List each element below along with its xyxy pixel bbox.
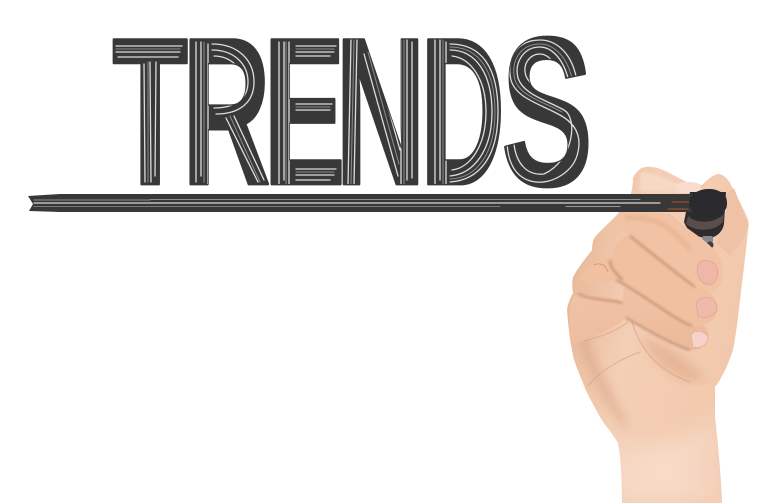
line body [28,194,693,212]
letter D: D [420,0,505,230]
marker body [684,189,728,248]
palm creases [574,322,690,386]
hand holding marker [567,167,749,503]
letter R: R [182,0,271,229]
letter S: S [501,0,593,230]
letter T [112,38,188,186]
letter E: E [263,0,346,229]
letter S [504,36,588,188]
marker tip over line [689,189,727,217]
ring finger [569,280,708,350]
index finger [612,212,723,292]
palm shadow [579,340,626,424]
letter E [270,38,342,186]
letter N [342,38,418,186]
soft shading clipped to hand [574,172,725,503]
hand and wrist silhouette [567,167,749,503]
underline stroke drawn by marker [28,194,693,212]
letter D [427,38,501,186]
finger crease shadows [578,236,695,350]
letter T: T [112,0,188,229]
highlight on top knuckle [640,172,678,192]
heading: TRENDS hand-lettered word [112,36,588,188]
line streaks [34,200,690,209]
palm center shadow [640,335,705,381]
letter R [189,38,270,186]
middle finger [578,235,718,326]
thumb nail [675,182,702,193]
wrist highlight [620,423,722,503]
thumb overlap at marker [716,188,748,256]
letter N: N [335,0,426,229]
